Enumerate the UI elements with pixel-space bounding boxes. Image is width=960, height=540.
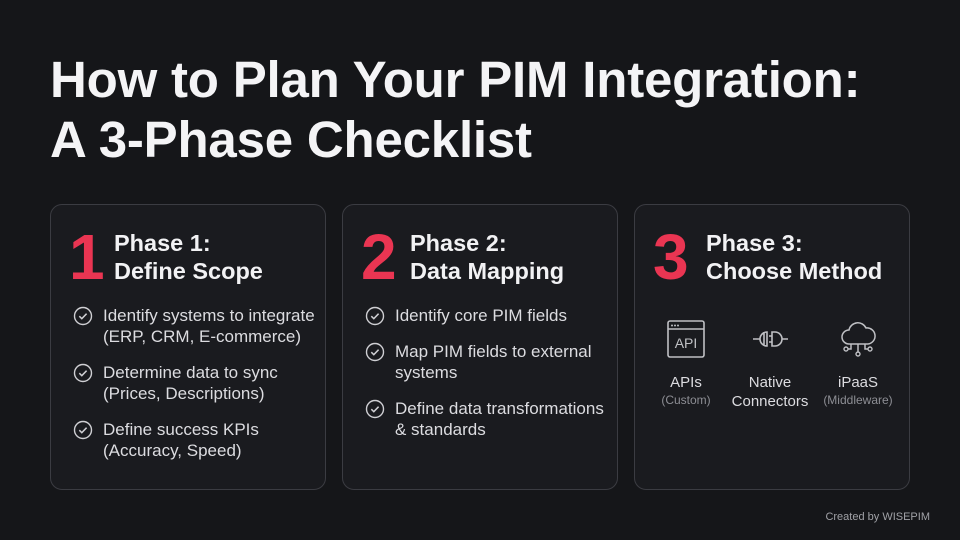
- item: Define success KPIs: [103, 420, 259, 439]
- heading phase 3: Choose Method: [706, 258, 882, 284]
- item: [74, 306, 315, 346]
- method: native connectors: Connectors: [732, 393, 808, 410]
- method: iPaaS: [823, 322, 893, 407]
- heading phase 2: [410, 230, 564, 284]
- item: [74, 420, 259, 460]
- item: & standards: [395, 420, 486, 439]
- item: (Accuracy, Speed): [103, 441, 242, 460]
- method: iPaaS: (Middleware): [823, 393, 893, 407]
- item: Determine data to sync: [103, 363, 278, 382]
- panel: phase 1: [50, 204, 326, 490]
- heading phase 1: Define Scope: [114, 258, 263, 284]
- item: (ERP, CRM, E-commerce): [103, 327, 301, 346]
- heading phase 2: Data Mapping: [410, 258, 564, 284]
- method: native connectors: [732, 331, 808, 410]
- method: iPaaS: iPaaS: [838, 374, 878, 391]
- heading phase 3: [706, 230, 882, 284]
- item: [74, 363, 278, 403]
- item: Identify systems to integrate: [103, 306, 315, 325]
- heading phase 2: Phase 2:: [410, 230, 507, 256]
- heading phase 3: Phase 3:: [706, 230, 803, 256]
- method: APIs: [661, 320, 711, 407]
- credit: Created by WISEPIM: [825, 511, 930, 523]
- item: Define data transformations: [395, 399, 604, 418]
- number 1: 1: [69, 221, 105, 293]
- item: [366, 342, 592, 382]
- title: A 3-Phase Checklist: [50, 111, 532, 168]
- title: [50, 51, 860, 168]
- item: Identify core PIM fields: [395, 306, 567, 325]
- method: APIs: APIs: [670, 374, 702, 391]
- number 2: 2: [361, 221, 397, 293]
- method: APIs: API: [675, 335, 697, 351]
- title: How to Plan Your PIM Integration:: [50, 51, 860, 108]
- number 3: 3: [653, 221, 689, 293]
- method: native connectors: Native: [749, 374, 791, 391]
- item: Map PIM fields to external: [395, 342, 592, 361]
- heading phase 1: Phase 1:: [114, 230, 211, 256]
- item: systems: [395, 363, 457, 382]
- item: [366, 399, 604, 439]
- method: APIs: (Custom): [661, 393, 711, 407]
- panel: phase 3: [634, 204, 910, 490]
- item: (Prices, Descriptions): [103, 384, 265, 403]
- panel: phase 2: [342, 204, 618, 490]
- heading phase 1: [114, 230, 263, 284]
